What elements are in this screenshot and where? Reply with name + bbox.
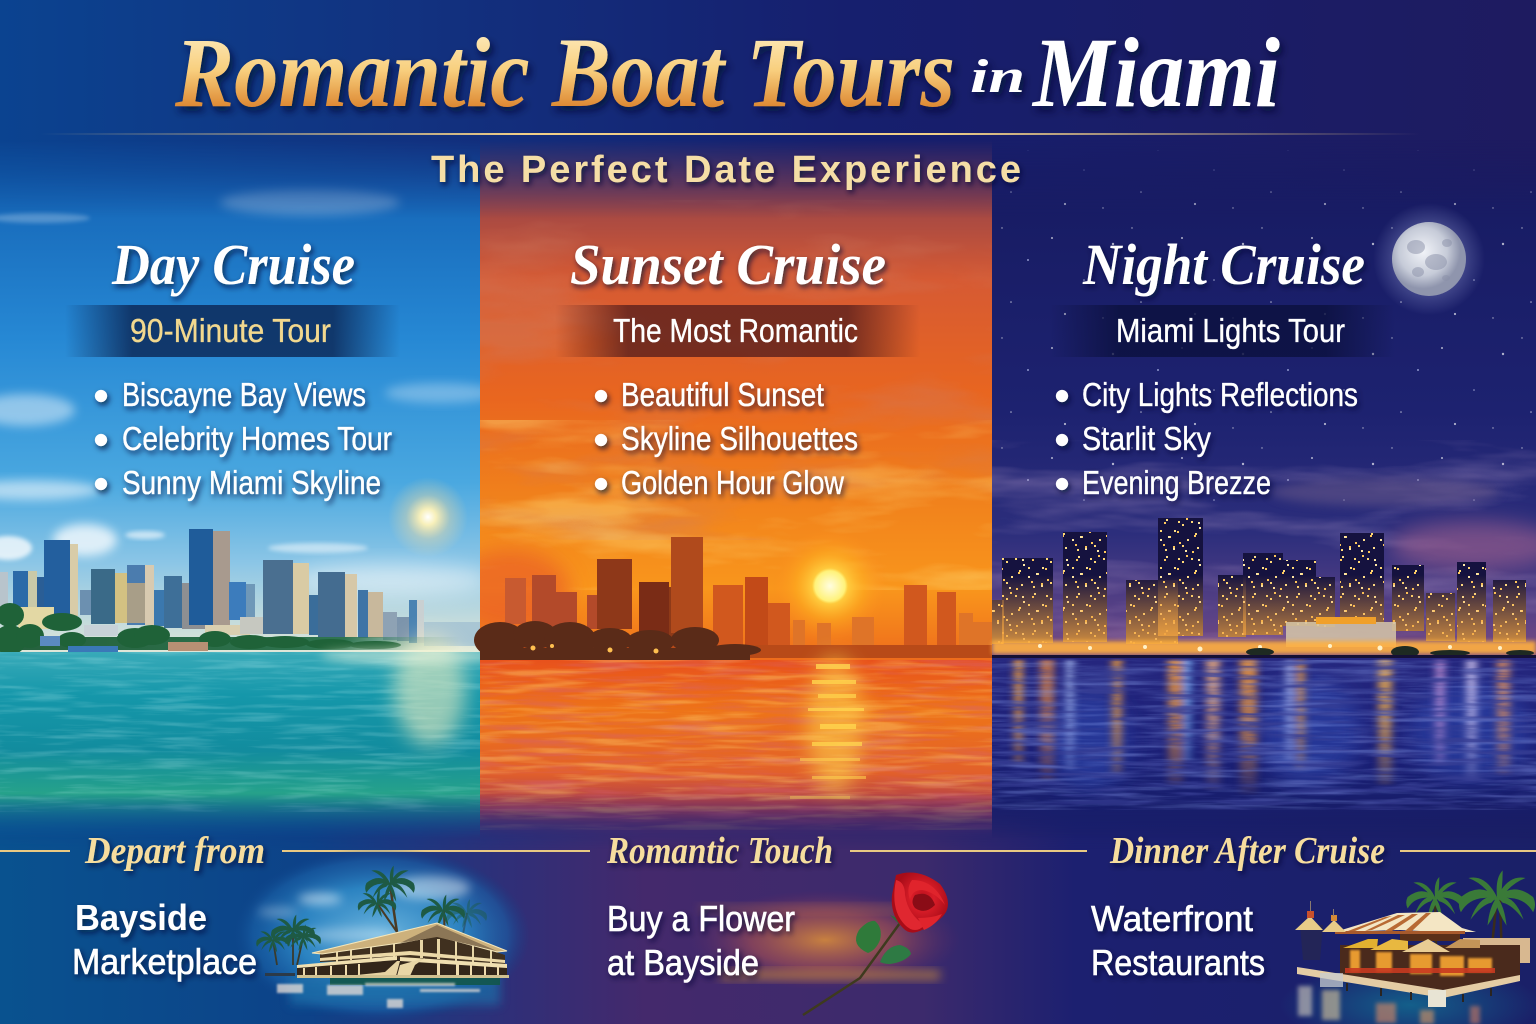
night heading: Night Cruise [1082,232,1365,297]
night bullet list: City Lights Reflections [1082,376,1358,413]
subtitle: The Perfect Date Experience [431,149,1021,191]
label: dinner after cruise: Dinner After Cruise [1109,830,1385,872]
column: night cruise text [1050,232,1395,501]
blue sheen on water [1050,675,1530,790]
bottom section gold divider lines [0,850,1536,852]
sunset ribbon [555,305,920,357]
palms behind bayside [256,866,487,965]
night bullet list: Evening Brezze [1082,464,1271,501]
day bullet list [95,376,392,501]
warm glow behind rose [690,890,960,990]
restaurant reflections [1298,986,1480,1024]
day clouds [0,189,495,596]
day skyline [0,529,480,646]
sunset treeline [474,621,992,662]
striped awning [1335,912,1476,932]
sunset bullet list [595,376,858,501]
sun reflection on water [790,655,866,799]
small kiosks [1295,901,1346,932]
text: buy a flower: Buy a Flower [607,898,795,939]
city light reflections [1014,660,1510,795]
day bullet list: Celebrity Homes Tour [122,420,392,457]
icon: red rose [803,872,948,1015]
day shoreline trees [0,603,447,652]
night water [992,658,1536,803]
sunset bullet list: Beautiful Sunset [621,376,824,413]
night sky [992,274,1536,655]
sunset clouds [480,238,992,628]
text: waterfront restaurants: Waterfront [1091,898,1253,939]
day ribbon: 90-Minute Tour [130,312,331,349]
bayside water reflection [277,978,500,1008]
day sun [391,480,465,554]
sunset bullet list: Skyline Silhouettes [621,420,858,457]
sunset sky [480,130,992,665]
bottom panel: dinner after cruise [1091,830,1536,1024]
text: bayside marketplace: Bayside [75,897,207,938]
title: in [970,50,1025,103]
title: Miami [1031,17,1280,128]
title: Romantic Boat Tours [174,17,955,128]
panel: night cruise scene [992,130,1536,838]
night bullet list: Starlit Sky [1082,420,1211,457]
day heading: Day Cruise [111,232,355,297]
stars [992,150,1536,510]
bottom panel: depart from [72,830,530,1023]
day sky [0,130,480,655]
bayside building [320,932,505,966]
label: romantic touch: Romantic Touch [606,830,833,872]
day water [0,652,480,842]
setting sun [791,544,869,632]
deck [1297,967,1520,998]
title divider rule [40,133,1420,135]
bottom panel: dinner after cruise: Restaurants [1091,942,1265,983]
night ribbon: Miami Lights Tour [1116,312,1345,349]
night bullet list [1056,376,1358,501]
label: depart from: Depart from [84,830,265,872]
illustration: waterfront restaurant [1280,870,1536,1024]
day sun reflection [394,634,466,746]
day bullet list: Biscayne Bay Views [122,376,366,413]
sunset water [480,660,992,845]
night ribbon [1050,305,1395,357]
day bullet list: Sunny Miami Skyline [122,464,381,501]
panel: sunset cruise scene [450,130,992,845]
column: day cruise text [65,232,400,501]
bottom panel: depart from: Marketplace [72,941,257,982]
moon [1373,203,1485,315]
restaurant palms [1406,870,1535,965]
panel: day cruise scene [0,130,500,842]
illustration: bayside marketplace [230,847,530,1023]
sunset skyline [505,537,992,647]
night clouds [992,440,1536,640]
sunset ribbon: The Most Romantic [613,312,858,349]
sunset bullet list: Golden Hour Glow [621,464,844,501]
bottom panel: romantic touch [606,830,960,1015]
umbrellas [1343,939,1480,952]
column: sunset cruise text [555,232,920,501]
bottom panel: romantic touch: at Bayside [607,942,759,983]
night skyline [992,518,1536,659]
day ribbon [65,305,400,357]
sunset heading: Sunset Cruise [570,232,886,297]
